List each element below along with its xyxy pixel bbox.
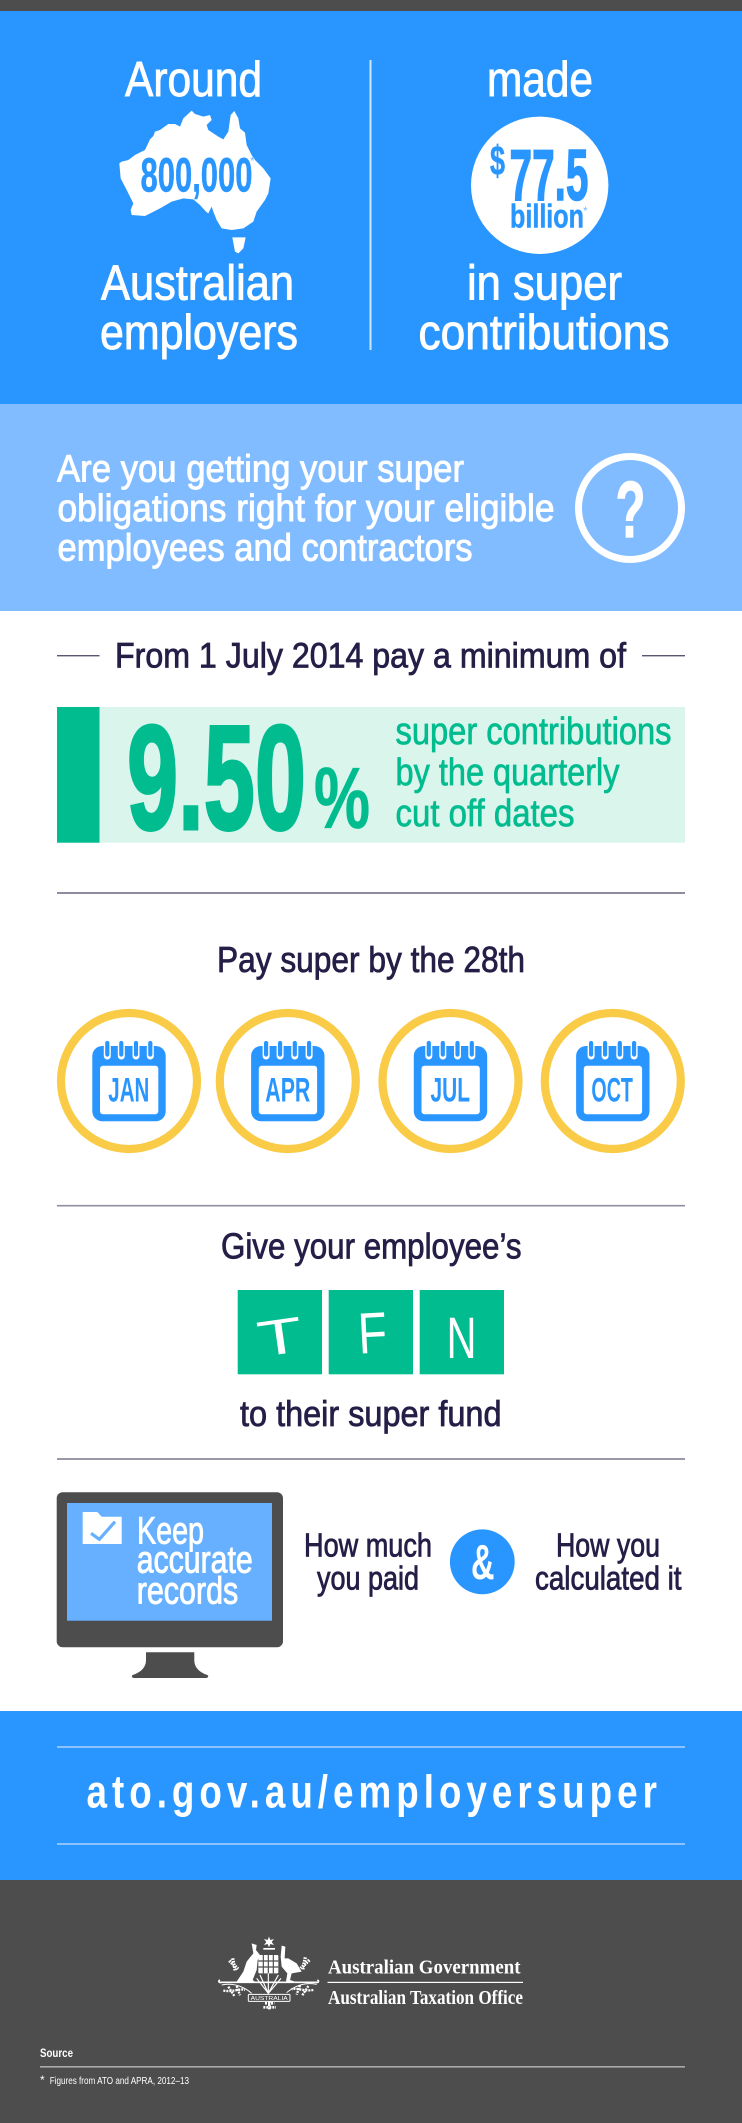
icon: Australia map with 800,000 xyxy=(119,111,271,253)
letter F: F xyxy=(356,1300,389,1367)
text: question: Are you getting your super xyxy=(57,448,464,490)
text: Australian employers: employers xyxy=(100,306,298,360)
icon: calendar April xyxy=(220,1013,356,1149)
text: how much you paid: you paid xyxy=(317,1559,419,1596)
icon: question mark circle xyxy=(578,456,682,560)
text: in super contributions: in super xyxy=(467,256,622,310)
icon: circle with $77.5 billion xyxy=(471,117,608,254)
text: URL: ato.gov.au/employersuper xyxy=(86,1765,657,1817)
icon: calendar January: JAN xyxy=(108,1072,149,1110)
heading: minimum contribution: From 1 July 2014 pay a minimum of xyxy=(115,636,626,676)
icon: question mark circle: ? xyxy=(616,465,646,554)
icon: ampersand circle: & xyxy=(471,1536,494,1590)
icon: calendar July: JUL xyxy=(430,1072,470,1110)
text: 77.5: 77.5 xyxy=(510,136,588,216)
heading: give your employee's: Give your employee’s xyxy=(221,1225,522,1266)
icon: Australian coat of arms xyxy=(219,1937,318,2009)
text: question: employees and contractors xyxy=(58,528,472,570)
text: question: obligations right for your eligible xyxy=(58,488,554,530)
icon: ampersand circle xyxy=(450,1529,515,1594)
icon: calendar October: OCT xyxy=(591,1072,633,1110)
text: source heading: Source xyxy=(40,2046,73,2060)
text: question xyxy=(57,448,554,570)
text: scroll motto: AUSTRALIA xyxy=(251,1996,288,2002)
text: in super contributions: contributions xyxy=(418,306,670,360)
panel: website link xyxy=(0,1711,742,1880)
text: by the quarterly cut off dates: by the quarterly xyxy=(396,752,620,794)
text: billion: billion xyxy=(510,197,584,234)
text: Australian employers xyxy=(100,256,298,360)
panel: question band xyxy=(0,404,742,611)
text: dollar sign: $ xyxy=(490,137,505,184)
letter N: N xyxy=(446,1306,476,1371)
text: to their super fund: to their super fund xyxy=(240,1393,502,1434)
panel: 9.50% callout xyxy=(57,694,685,861)
icon: checked folder xyxy=(83,1512,122,1544)
footnote marker on billion: * xyxy=(583,204,588,218)
text: made: made xyxy=(487,53,593,107)
icon: calendar January xyxy=(61,1013,197,1149)
heading: pay super by the 28th: Pay super by the 28th xyxy=(217,939,525,980)
panel: headline statistics xyxy=(0,11,742,404)
icon: calendar July xyxy=(382,1013,518,1149)
text: how you calculated it: calculated it xyxy=(535,1559,682,1596)
text: how you calculated it xyxy=(535,1527,682,1596)
text: keep accurate records: accurate xyxy=(137,1540,253,1582)
text: 9.50: 9.50 xyxy=(127,694,306,861)
letter T: T xyxy=(254,1306,306,1368)
text: how much you paid xyxy=(304,1527,432,1596)
footnote marker on 800,000: * xyxy=(250,154,255,168)
icon: calendar October xyxy=(545,1013,681,1149)
text: keep accurate records: records xyxy=(137,1570,238,1612)
text: source note: Figures from ATO and APRA, 2012–13 xyxy=(50,2076,189,2087)
text: keep accurate records xyxy=(137,1510,253,1612)
text: by the quarterly cut off dates: super contributions xyxy=(396,711,672,753)
text: source note xyxy=(40,2073,189,2087)
text: how you calculated it: How you xyxy=(556,1527,660,1564)
text: keep accurate records: Keep xyxy=(137,1510,204,1552)
top dark strip xyxy=(0,0,742,11)
text: how much you paid: How much xyxy=(304,1527,432,1564)
text: by the quarterly cut off dates: cut off dates xyxy=(396,793,574,835)
text: by the quarterly cut off dates xyxy=(396,711,672,835)
text: Around: Around xyxy=(125,53,262,107)
text: 800,000: 800,000 xyxy=(140,150,252,202)
text: in super contributions xyxy=(418,256,670,360)
text: Australian Government: Australian Government xyxy=(328,1956,521,1978)
icon: TFN tiles xyxy=(238,1290,504,1374)
icon: calendar April: APR xyxy=(265,1072,310,1110)
icon: monitor with keep accurate records xyxy=(57,1492,283,1678)
text: Australian employers: Australian xyxy=(101,256,294,310)
text: source note: * xyxy=(40,2073,45,2087)
text: Australian Taxation Office: Australian Taxation Office xyxy=(328,1987,523,2009)
panel: footer xyxy=(0,1880,742,2123)
divider xyxy=(370,60,372,350)
text: percent sign: % xyxy=(314,751,370,847)
